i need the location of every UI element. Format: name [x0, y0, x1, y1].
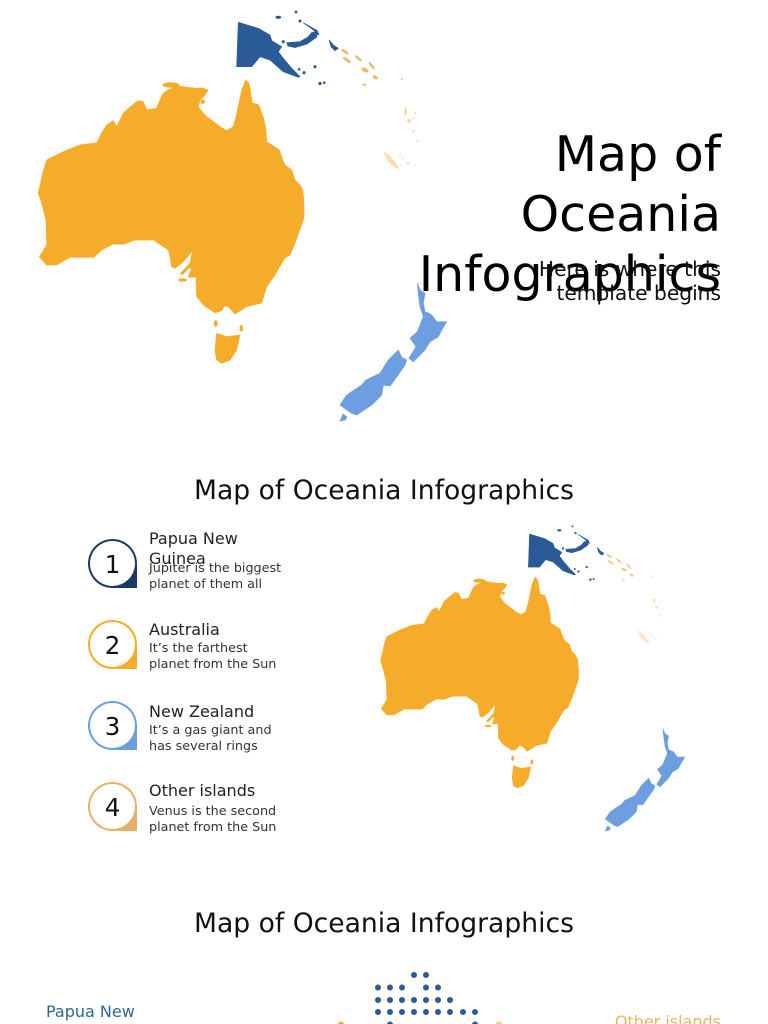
item 1 title: Guinea	[149, 549, 206, 568]
item 4 title: Other islands	[149, 781, 255, 800]
list item 4: Other islands	[88, 781, 276, 834]
item 4 text	[149, 804, 276, 834]
list item 3: New Zealand	[88, 701, 272, 754]
item 1 title: Papua New	[149, 529, 238, 548]
section heading 3: Map of Oceania Infographics	[194, 908, 574, 939]
item 1 text: Jupiter is the biggest	[149, 561, 281, 576]
badge 4	[88, 782, 137, 831]
badge 1	[88, 539, 137, 588]
item 1 title	[149, 529, 238, 568]
cover title	[419, 126, 722, 303]
badge 3	[88, 701, 137, 750]
map: Oceania top	[38, 10, 447, 422]
item 4 text: planet from the Sun	[149, 820, 276, 834]
map region: New Zealand	[340, 283, 447, 421]
item 2 text: planet from the Sun	[149, 656, 276, 672]
map 2 region: Papua New Guinea	[528, 526, 604, 581]
item 1 text	[148, 561, 281, 592]
item 3 title: New Zealand	[149, 702, 254, 721]
item 4 text: Venus is the second	[149, 804, 276, 819]
cover subtitle: Here is where this	[539, 257, 721, 281]
map 2 region: Australia	[381, 577, 578, 788]
map region: Papua New Guinea	[237, 11, 338, 85]
label: Papua New Guinea: Papua New	[46, 1002, 135, 1021]
cover title: Map of	[555, 126, 721, 183]
map region: Australia	[38, 80, 304, 363]
cover title: Infographics	[419, 246, 721, 303]
badge 4: 4	[105, 793, 120, 822]
badge 2: 2	[105, 631, 120, 660]
badge 1: 1	[105, 550, 120, 579]
item 2 text	[149, 641, 276, 672]
section heading 2: Map of Oceania Infographics	[194, 475, 574, 506]
cover title: Oceania	[521, 186, 721, 243]
map region: other islands	[340, 48, 418, 169]
item 3 text: It’s a gas giant and	[149, 723, 272, 738]
item 3 text: has several rings	[149, 738, 258, 754]
cover subtitle: template begins	[556, 281, 721, 305]
list item 1: Papua New Guinea	[88, 529, 281, 592]
cover subtitle	[539, 257, 721, 305]
badge 2	[88, 620, 137, 669]
item 1 text: planet of them all	[149, 576, 262, 592]
item 2 text: It’s the farthest	[149, 641, 248, 656]
map 2 region: New Zealand	[605, 728, 685, 831]
map 2 region: other islands	[606, 553, 664, 644]
badge 3: 3	[105, 712, 120, 741]
item 3 text	[149, 723, 272, 754]
item 2 title: Australia	[149, 620, 220, 639]
list item 2: Australia	[88, 620, 276, 672]
